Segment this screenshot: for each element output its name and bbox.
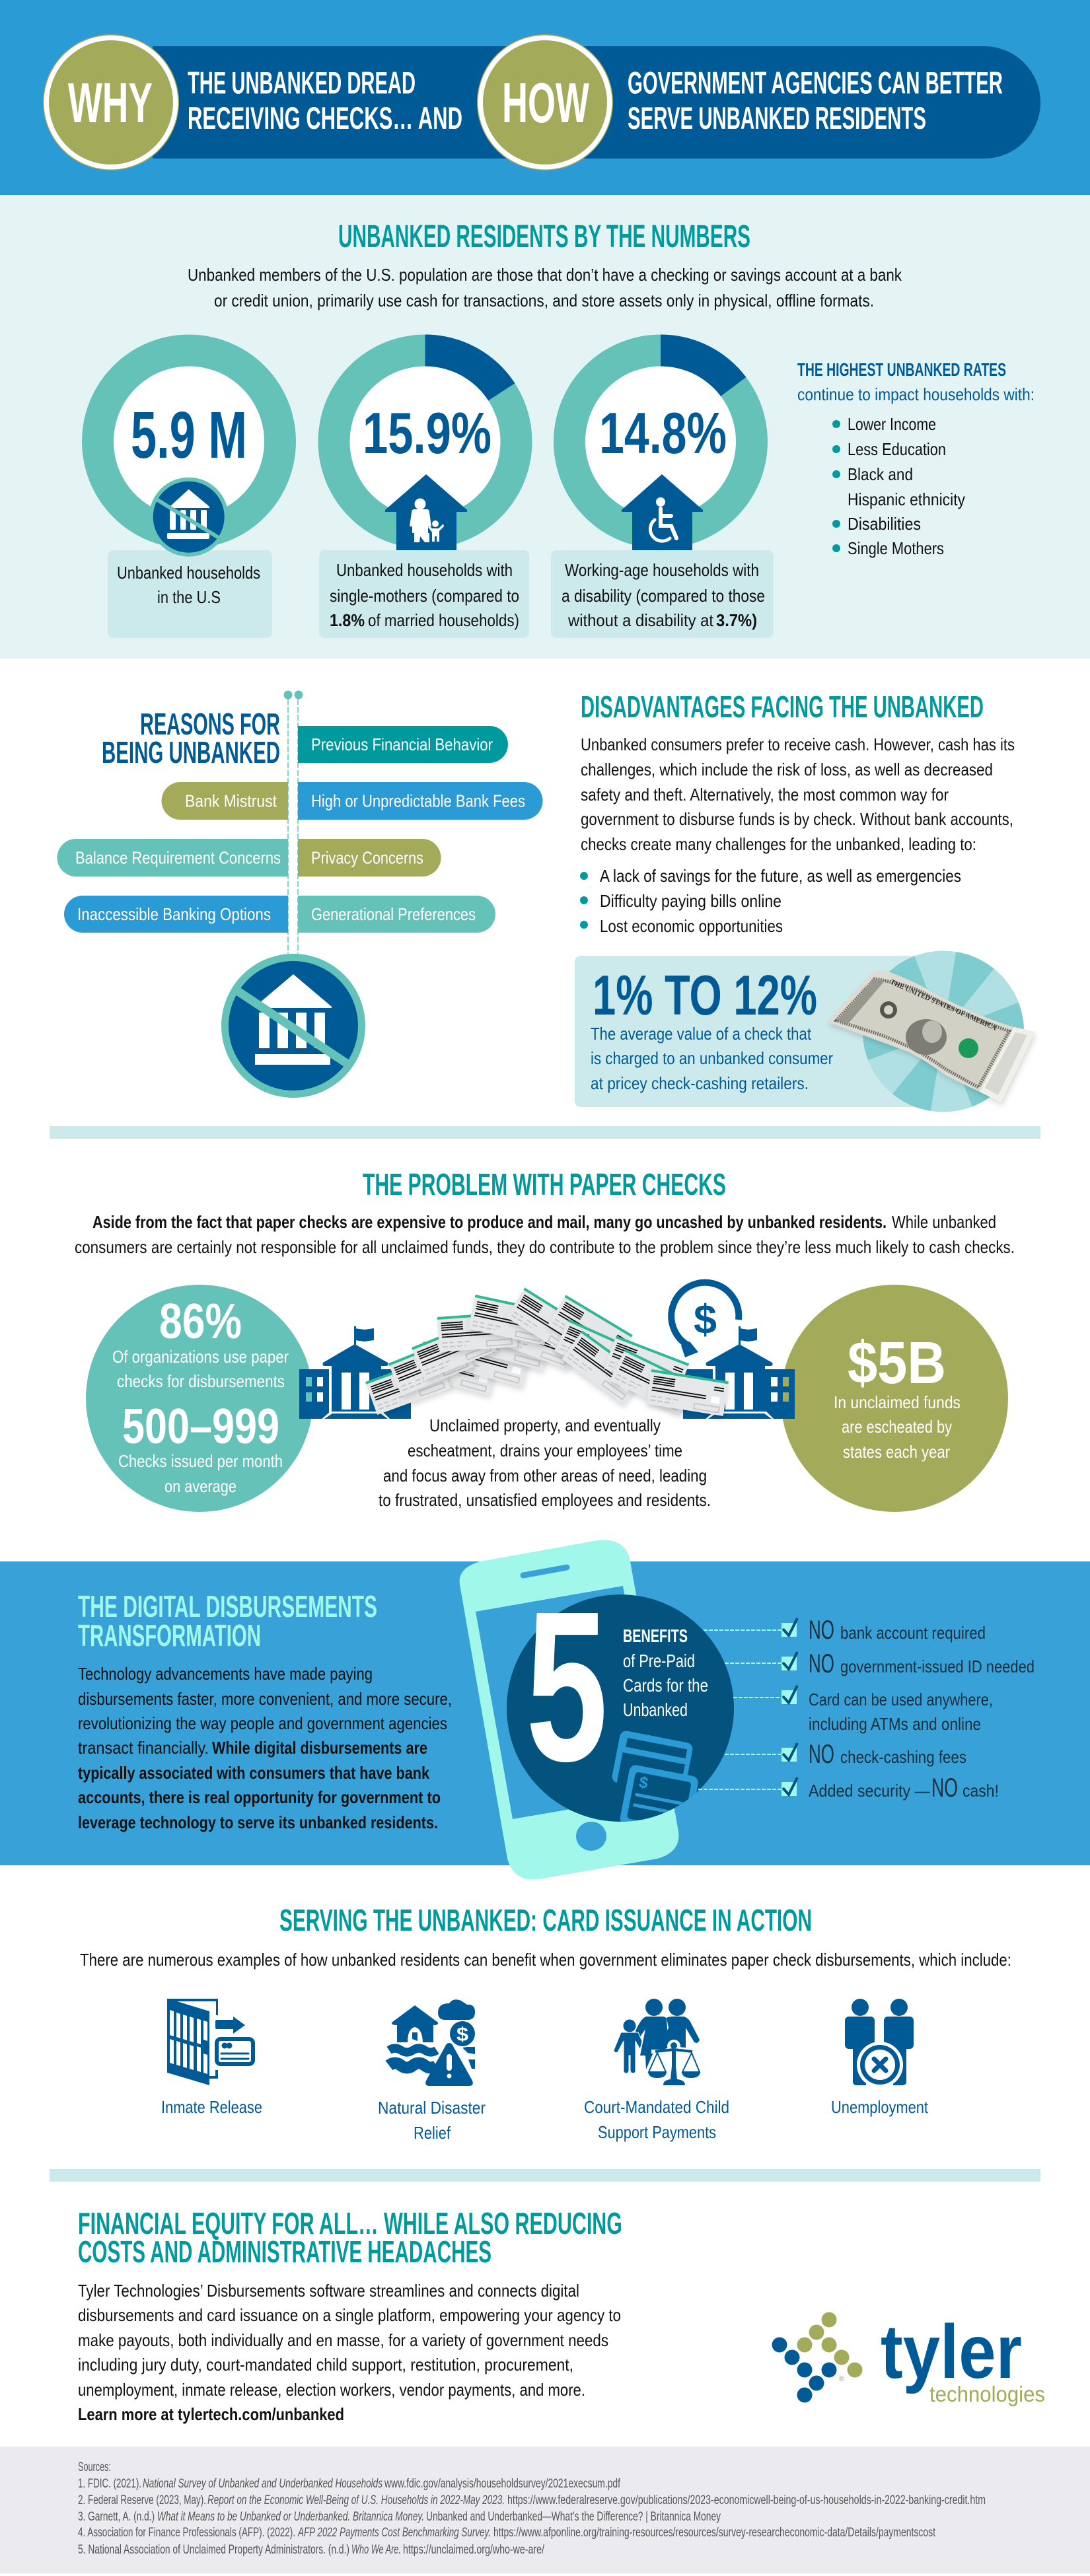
callout text: is charged to an unbanked consumer bbox=[591, 1048, 833, 1068]
stat circle: $5B bbox=[781, 1285, 1008, 1512]
body text: While digital disbursements are bbox=[212, 1738, 427, 1758]
badge: why bbox=[43, 34, 179, 170]
panel: sources: Sources: bbox=[78, 2460, 111, 2474]
header pill bbox=[153, 46, 1040, 159]
pill: high or unpredictable bank fees: High or Unpredictable Bank Fees bbox=[311, 791, 525, 811]
icon: prepaid cards: $ bbox=[637, 1773, 650, 1793]
pill: balance requirement concerns: Balance Requirement Concerns bbox=[75, 848, 281, 868]
body text: accounts, there is real opportunity for government to bbox=[78, 1787, 441, 1807]
body text: disbursements and card issuance on a single platform, empowering your agency to bbox=[78, 2305, 621, 2325]
caption: 15.9%: 1.8% bbox=[330, 610, 365, 630]
icon: right government building bbox=[683, 1326, 795, 1420]
label: natural disaster relief: Relief bbox=[414, 2123, 451, 2143]
caption: 14.8%: 3.7%) bbox=[716, 610, 757, 630]
callout: 1% to 12% bbox=[575, 951, 1035, 1112]
stat circle: organizations: 500–999 bbox=[122, 1398, 279, 1454]
caption: 15.9% bbox=[319, 550, 529, 638]
icon: large no bank bbox=[221, 954, 365, 1098]
stat: 15.9% donut bbox=[318, 334, 532, 548]
body text: challenges, which include the risk of loss, as well as decreased bbox=[581, 760, 993, 779]
caption: 15.9%: Unbanked households with bbox=[336, 560, 513, 580]
icon: house with wheelchair bbox=[622, 474, 703, 550]
panel: sources bbox=[0, 2447, 1090, 2573]
pill: bank mistrust bbox=[161, 782, 288, 820]
icon: natural disaster relief: $ bbox=[456, 2024, 468, 2046]
pill: inaccessible banking options: Inaccessible Banking Options bbox=[77, 904, 271, 924]
list: highest unbanked rates: Disabilities bbox=[848, 514, 921, 534]
source 4: AFP 2022 Payments Cost Benchmarking Survey. bbox=[297, 2526, 491, 2540]
caption: 5.9 M: in the U.S bbox=[157, 587, 221, 607]
benefits circle bbox=[507, 1594, 734, 1822]
stat: 15.9% donut: 15.9% bbox=[363, 400, 491, 466]
heading bbox=[78, 1589, 377, 1653]
image: dollar bill bbox=[827, 971, 1035, 1102]
icon: circular dollar arrow: $ bbox=[694, 1297, 717, 1343]
icon: left government building bbox=[299, 1326, 411, 1420]
pill: bank mistrust: Bank Mistrust bbox=[185, 791, 277, 811]
bullet list: A lack of savings for the future, as well as emergencies bbox=[600, 866, 961, 886]
center text bbox=[379, 1415, 711, 1510]
benefit 4: check-cashing fees bbox=[840, 1747, 966, 1767]
intro text: While unbanked bbox=[892, 1212, 996, 1232]
benefits label bbox=[623, 1626, 708, 1720]
body text: checks create many challenges for the unbanked, leading to: bbox=[581, 834, 976, 854]
stat circle: organizations: 86% bbox=[159, 1293, 242, 1349]
body text: unemployment, inmate release, election workers, vendor payments, and more. bbox=[78, 2380, 585, 2400]
list: highest unbanked rates: continue to impact households with: bbox=[797, 384, 1035, 404]
badge: how: HOW bbox=[502, 72, 589, 135]
image: dollar bill: THE UNITED STATES OF AMERICA bbox=[889, 978, 998, 1032]
body text: Tyler Technologies’ Disbursements software streamlines and connects digital bbox=[78, 2281, 579, 2301]
icon: prepaid cards bbox=[612, 1731, 698, 1822]
stat circle: organizations: checks for disbursements bbox=[117, 1371, 285, 1391]
dotted connector lines bbox=[698, 1630, 781, 1789]
stat: 1% TO 12% bbox=[593, 964, 817, 1027]
benefits label: Cards for the bbox=[623, 1675, 708, 1696]
list: highest unbanked rates: Black and bbox=[848, 464, 913, 484]
pill: balance requirement concerns bbox=[57, 839, 288, 877]
body text: Unbanked consumers prefer to receive cash. However, cash has its bbox=[581, 734, 1015, 754]
source 3: What it Means to be Unbanked or Underbanked. Britannica Money. bbox=[157, 2510, 424, 2524]
bullet list: Difficulty paying bills online bbox=[600, 891, 781, 911]
benefit 5 bbox=[781, 1773, 999, 1803]
icon: smartphone bbox=[460, 1540, 678, 1880]
label: natural disaster relief bbox=[378, 2098, 486, 2143]
body text bbox=[581, 734, 1015, 854]
heading bbox=[102, 707, 280, 769]
source 1: 1. FDIC. (2021). bbox=[78, 2477, 141, 2491]
center text: escheatment, drains your employees’ time bbox=[408, 1441, 682, 1460]
illustration: arc of paper checks bbox=[365, 1287, 729, 1416]
bullet list bbox=[580, 866, 961, 936]
benefit 5: NO bbox=[931, 1773, 958, 1803]
body text: typically associated with consumers that have bank bbox=[78, 1763, 429, 1783]
callout text bbox=[591, 1024, 833, 1093]
benefit 2 bbox=[781, 1649, 1035, 1678]
body text: Learn more at tylertech.com/unbanked bbox=[78, 2404, 344, 2424]
source 2 bbox=[78, 2493, 986, 2507]
center text: and focus away from other areas of need, leading bbox=[383, 1466, 707, 1485]
header text: how bbox=[628, 65, 1003, 135]
stat circle: organizations: on average bbox=[164, 1476, 236, 1496]
heading: UNBANKED RESIDENTS BY THE NUMBERS bbox=[338, 219, 750, 254]
caption: 5.9 M bbox=[108, 550, 272, 638]
list: highest unbanked rates: Lower Income bbox=[848, 414, 936, 434]
header text: why: RECEIVING CHECKS… AND bbox=[188, 100, 462, 135]
benefit 3 bbox=[781, 1686, 993, 1734]
list: highest unbanked rates: Less Education bbox=[848, 439, 946, 459]
body text: including jury duty, court-mandated child support, restitution, procurement, bbox=[78, 2355, 573, 2375]
panel: disadvantages facing the unbanked bbox=[575, 690, 1035, 1112]
source 4: https://www.afponline.org/training-resources/resources/survey-researcheconomic-data/Details/paymentscost bbox=[493, 2526, 936, 2540]
divider bbox=[50, 2169, 1040, 2182]
benefits label: BENEFITS bbox=[623, 1626, 688, 1646]
source 1 bbox=[78, 2477, 621, 2491]
pill: generational preferences: Generational Preferences bbox=[311, 904, 476, 924]
pill: generational preferences bbox=[298, 896, 495, 933]
bullet list: Lost economic opportunities bbox=[600, 916, 783, 936]
source 1: National Survey of Unbanked and Underbanked Households bbox=[143, 2477, 382, 2491]
body text: make payouts, both individually and en masse, for a variety of government needs bbox=[78, 2330, 608, 2350]
benefit 1 bbox=[781, 1616, 986, 1645]
heading: THE PROBLEM WITH PAPER CHECKS bbox=[363, 1167, 726, 1201]
pill: privacy concerns bbox=[298, 839, 441, 877]
label: court-mandated child support payments: Court-Mandated Child bbox=[584, 2097, 729, 2117]
benefits label: of Pre-Paid bbox=[623, 1651, 695, 1671]
body text: transact financially. bbox=[78, 1738, 209, 1758]
header text: why bbox=[188, 65, 462, 135]
badge: how bbox=[477, 34, 613, 170]
panel: the problem with paper checks bbox=[75, 1167, 1015, 1512]
benefit 3: including ATMs and online bbox=[809, 1714, 981, 1734]
stat circle: organizations: Of organizations use paper bbox=[112, 1347, 289, 1367]
center text: Unclaimed property, and eventually bbox=[429, 1415, 661, 1435]
caption: 14.8% bbox=[551, 550, 774, 638]
header text: why: THE UNBANKED DREAD bbox=[188, 65, 416, 100]
benefit 2: NO bbox=[809, 1649, 834, 1678]
caption: 5.9 M: Unbanked households bbox=[117, 563, 260, 583]
benefit 4 bbox=[781, 1740, 966, 1769]
source 3: 3. Garnett, A. (n.d.) bbox=[78, 2510, 155, 2524]
benefit 1: NO bbox=[809, 1616, 834, 1645]
benefit 5: Added security — bbox=[809, 1781, 930, 1801]
icon: inmate release bbox=[167, 1999, 253, 2085]
stat: 5.9 M donut: 5.9 M bbox=[131, 398, 247, 472]
panel: serving the unbanked bbox=[80, 1903, 1011, 2143]
source 5: 5. National Association of Unclaimed Property Administrators. (n.d.) bbox=[78, 2543, 349, 2557]
starburst circle bbox=[863, 951, 1024, 1112]
intro text: Aside from the fact that paper checks are expensive to produce and mail, many go uncashed by unbanked residents. bbox=[92, 1212, 887, 1232]
body text: Technology advancements have made paying bbox=[78, 1664, 373, 1684]
source 3: Unbanked and Underbanked—What’s the Difference? | Britannica Money bbox=[426, 2510, 721, 2524]
logo: tyler technologies: technologies bbox=[929, 2382, 1045, 2406]
source 4 bbox=[78, 2526, 936, 2540]
panel: financial equity for all bbox=[78, 2206, 1045, 2424]
benefits label: Unbanked bbox=[623, 1699, 688, 1720]
heading bbox=[78, 2206, 622, 2269]
heading: THE DIGITAL DISBURSEMENTS bbox=[78, 1589, 377, 1624]
body text: government to disburse funds is by check. Without bank accounts, bbox=[581, 809, 1013, 829]
logo: tyler technologies: tyler bbox=[881, 2310, 1022, 2394]
body text bbox=[78, 2281, 621, 2424]
source 1: www.fdic.gov/analysis/householdsurvey/2021execsum.pdf bbox=[384, 2477, 621, 2491]
list: highest unbanked rates bbox=[797, 359, 1035, 558]
body text: safety and theft. Alternatively, the most common way for bbox=[581, 785, 949, 805]
panel: unbanked residents by the numbers bbox=[0, 195, 1090, 659]
panel: header banner bbox=[0, 0, 1090, 195]
panel: reasons for being unbanked bbox=[57, 691, 542, 1098]
list: highest unbanked rates: Hispanic ethnicity bbox=[848, 489, 965, 509]
body text: revolutionizing the way people and government agencies bbox=[78, 1713, 447, 1733]
caption: 15.9%: single-mothers (compared to bbox=[330, 586, 519, 606]
source 3 bbox=[78, 2510, 721, 2524]
benefit 1: bank account required bbox=[840, 1623, 986, 1643]
logo: tyler technologies: ® bbox=[839, 2375, 844, 2383]
pill: high or unpredictable bank fees bbox=[298, 782, 542, 820]
pill: inaccessible banking options bbox=[64, 896, 288, 933]
stat circle: organizations: Checks issued per month bbox=[118, 1451, 283, 1471]
icon: circular dollar arrow bbox=[671, 1283, 739, 1357]
benefit 5: cash! bbox=[963, 1781, 999, 1801]
source 5: Who We Are. bbox=[351, 2543, 401, 2557]
body text: disbursements faster, more convenient, and more secure, bbox=[78, 1689, 452, 1709]
caption: 14.8%: a disability (compared to those bbox=[562, 586, 765, 606]
heading: TRANSFORMATION bbox=[78, 1618, 261, 1653]
benefit 4: NO bbox=[809, 1740, 834, 1769]
stat: 14.8% donut bbox=[554, 334, 768, 548]
divider bbox=[50, 1126, 1040, 1139]
caption: 15.9%: of married households) bbox=[368, 610, 519, 630]
logo: tyler technologies bbox=[772, 2310, 1045, 2406]
stat circle: organizations bbox=[86, 1285, 313, 1512]
label: inmate release: Inmate Release bbox=[161, 2097, 262, 2117]
stat circle: $5B: states each year bbox=[843, 1442, 950, 1462]
icon: unemployment bbox=[845, 1999, 914, 2088]
source 2: 2. Federal Reserve (2023, May). bbox=[78, 2493, 206, 2507]
icon: house with single mother bbox=[385, 474, 467, 550]
label: court-mandated child support payments: Support Payments bbox=[598, 2122, 716, 2142]
panel: the digital disbursements transformation bbox=[0, 1540, 1090, 1880]
body text bbox=[78, 1664, 452, 1832]
list: highest unbanked rates: Single Mothers bbox=[848, 538, 944, 558]
stat: 14.8% donut: 14.8% bbox=[599, 400, 727, 466]
callout text: at pricey check-cashing retailers. bbox=[591, 1073, 809, 1093]
label: unemployment: Unemployment bbox=[831, 2097, 929, 2117]
intro text bbox=[188, 265, 902, 310]
icon: natural disaster relief bbox=[389, 1999, 477, 2089]
big number 5: 5 bbox=[526, 1567, 608, 1806]
stat: 5.9 M donut bbox=[82, 334, 296, 548]
benefit 3: Card can be used anywhere, bbox=[809, 1690, 993, 1709]
intro text: Unbanked members of the U.S. population are those that don’t have a checking or savings account at a bank bbox=[188, 265, 902, 285]
stat circle: $5B: In unclaimed funds bbox=[834, 1392, 961, 1412]
stat circle: $5B: $5B bbox=[848, 1330, 946, 1396]
heading: BEING UNBANKED bbox=[102, 735, 280, 769]
heading: SERVING THE UNBANKED: CARD ISSUANCE IN ACTION bbox=[279, 1903, 812, 1937]
center text: to frustrated, unsatisfied employees and residents. bbox=[379, 1490, 711, 1510]
source 5: https://unclaimed.org/who-we-are/ bbox=[403, 2543, 545, 2557]
pill: previous financial behavior bbox=[298, 726, 508, 763]
stat circle: $5B: are escheated by bbox=[842, 1417, 952, 1437]
label: natural disaster relief: Natural Disaster bbox=[378, 2098, 486, 2118]
pill: privacy concerns: Privacy Concerns bbox=[311, 848, 423, 868]
intro text: or credit union, primarily use cash for transactions, and store assets only in physical, offline formats. bbox=[214, 291, 874, 310]
callout text: The average value of a check that bbox=[591, 1024, 812, 1044]
heading: REASONS FOR bbox=[140, 707, 280, 741]
benefit 2: government-issued ID needed bbox=[840, 1657, 1035, 1676]
icon: no bank bbox=[149, 478, 229, 557]
label: court-mandated child support payments bbox=[584, 2097, 729, 2142]
source 4: 4. Association for Finance Professionals (AFP). (2022). bbox=[78, 2526, 295, 2540]
badge: why: WHY bbox=[68, 72, 153, 135]
pill: previous financial behavior: Previous Financial Behavior bbox=[311, 734, 493, 754]
heading: FINANCIAL EQUITY FOR ALL… WHILE ALSO REDUCING bbox=[78, 2206, 622, 2240]
caption: 14.8%: Working-age households with bbox=[565, 560, 759, 580]
body text: leverage technology to serve its unbanked residents. bbox=[78, 1812, 438, 1832]
source 2: Report on the Economic Well-Being of U.S. Households in 2022-May 2023. bbox=[207, 2493, 505, 2507]
caption: 14.8%: without a disability at bbox=[567, 610, 714, 630]
icon: court-mandated child support bbox=[614, 1999, 700, 2085]
intro text bbox=[75, 1212, 1015, 1257]
heading: COSTS AND ADMINISTRATIVE HEADACHES bbox=[78, 2235, 491, 2269]
